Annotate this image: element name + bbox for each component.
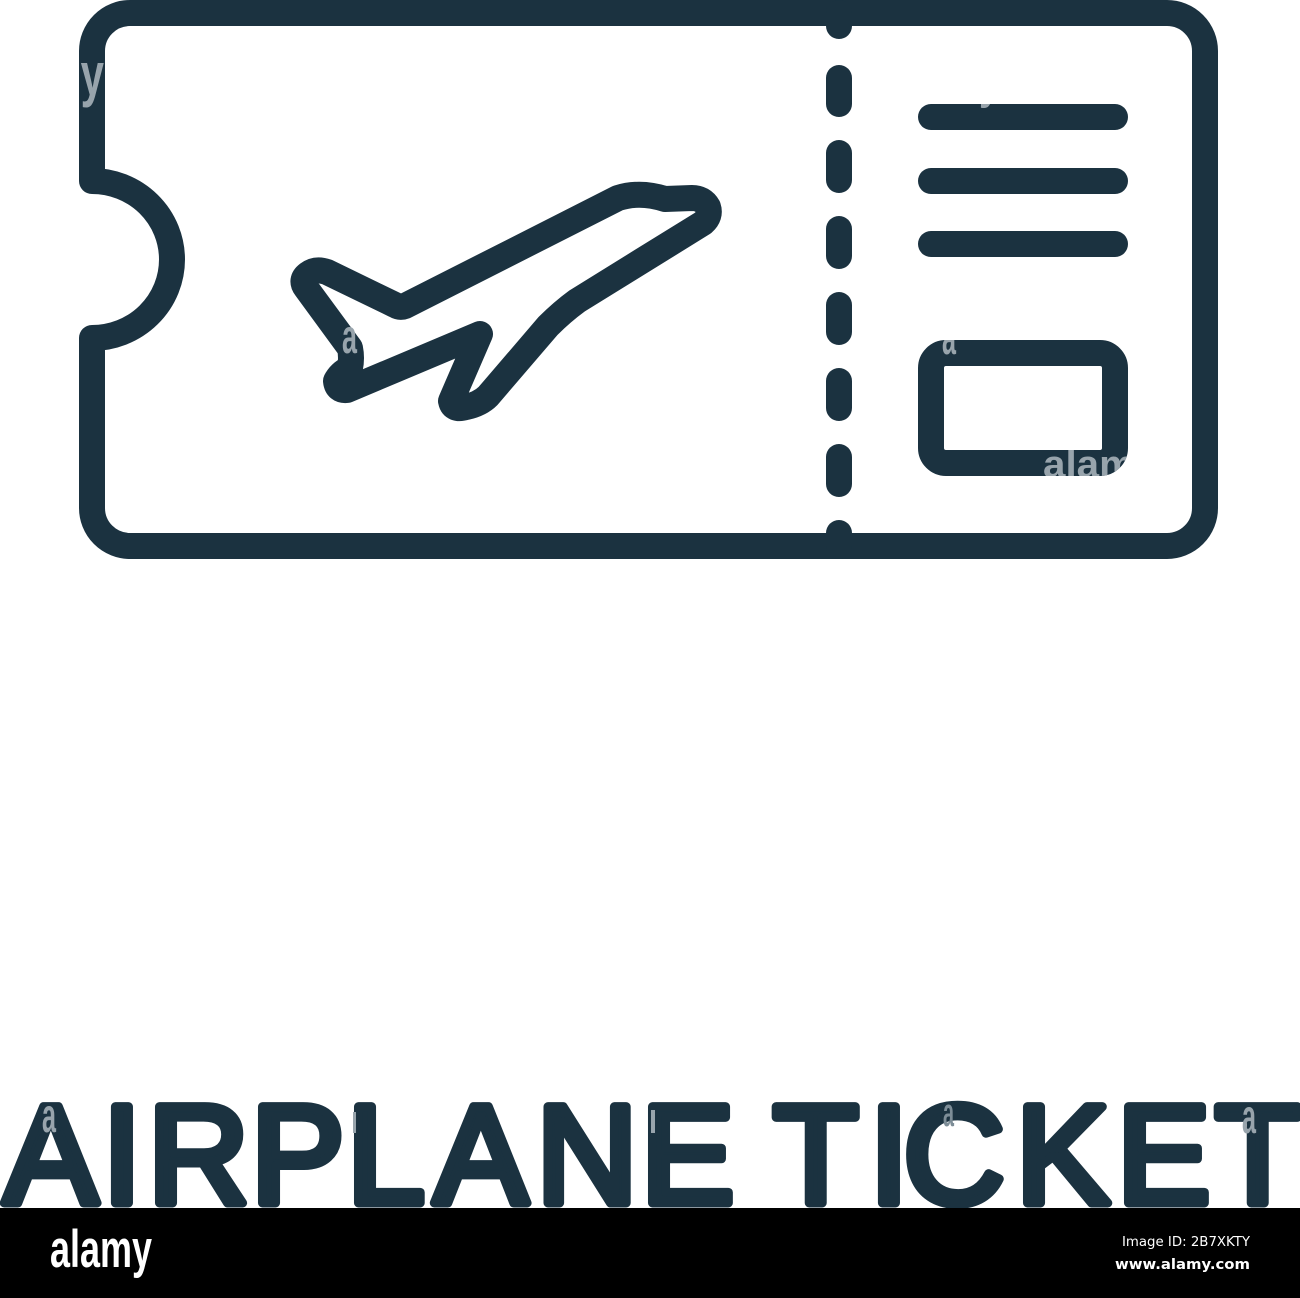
watermark fragments on icon: a xyxy=(942,312,956,365)
text lines xyxy=(931,117,1115,244)
watermark fragments on title: a xyxy=(943,1091,954,1135)
perforation dashes xyxy=(826,13,852,546)
image id: Image ID: 2B7XKTY xyxy=(1122,1235,1250,1250)
ticket outline with notch xyxy=(92,13,1205,546)
watermark fragments on title: a xyxy=(1242,1091,1256,1144)
watermark fragments on icon: y xyxy=(979,56,1000,109)
footer logo: alamy xyxy=(50,1220,152,1279)
icon: airplane ticket xyxy=(92,13,1205,546)
footer bar xyxy=(0,1208,1300,1298)
icon: airplane xyxy=(303,195,709,408)
watermark fragments on icon: a xyxy=(342,311,357,364)
watermark fragments on icon: alam xyxy=(1043,444,1135,486)
stub rectangle xyxy=(931,353,1115,463)
watermark fragments on title xyxy=(42,1090,1256,1144)
watermark fragments on icon: ny xyxy=(55,41,104,108)
watermark fragments on icon xyxy=(81,63,1126,476)
watermark fragments on title: a xyxy=(42,1090,56,1143)
website: www.alamy.com xyxy=(1115,1257,1250,1273)
title: AIRPLANE TICKET xyxy=(4,1076,1300,1233)
